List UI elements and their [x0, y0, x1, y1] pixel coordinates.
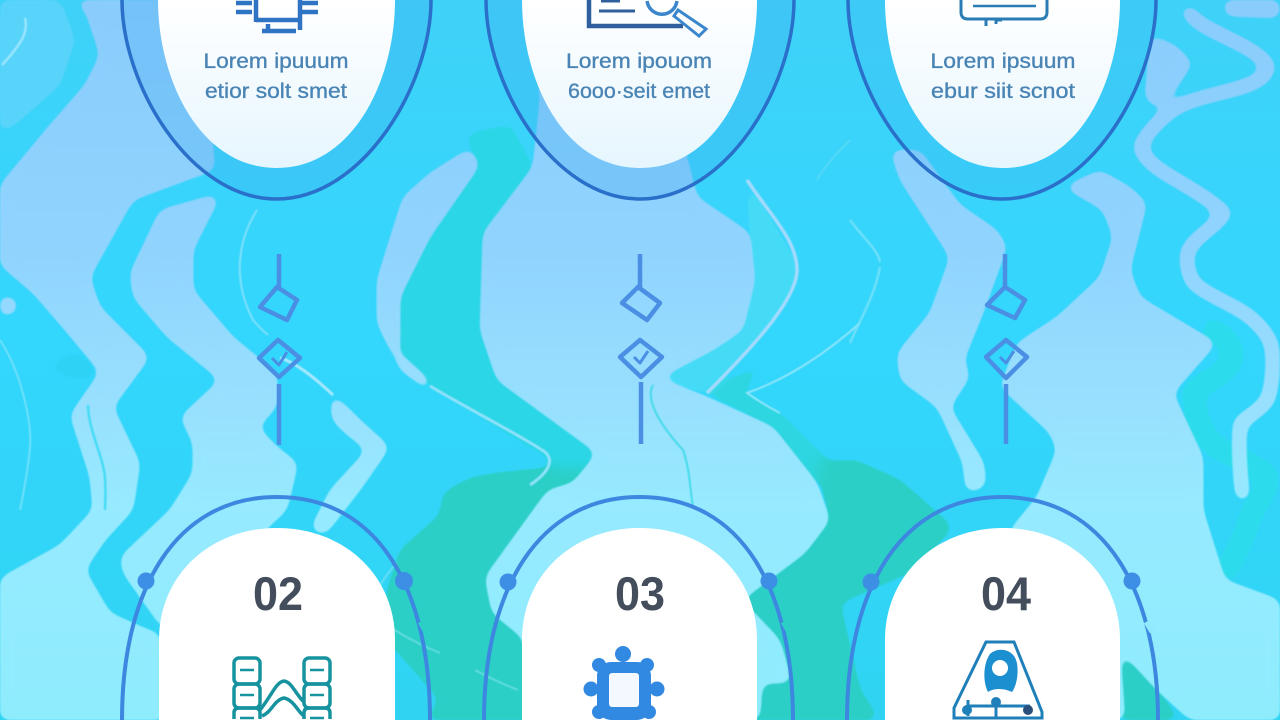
card: item 02 number (bottom left) [122, 497, 430, 720]
connector: column 1 [259, 254, 300, 445]
icon: message bubble [961, 0, 1047, 26]
label: item 01: etior solt smet [205, 80, 347, 103]
number: 02: 02 [253, 567, 303, 620]
ring: item 03 [848, 0, 1156, 199]
label: item 03: Lorem ipsuum [930, 50, 1076, 73]
oval panel: bottom left [159, 528, 395, 720]
label: item 03 [930, 50, 1076, 103]
oval panel: item 03 [885, 0, 1120, 168]
ring dots: bottom left [138, 572, 413, 590]
oval panel: item 02 [522, 0, 757, 168]
ring dots: bottom right [862, 572, 1140, 590]
label: item 01: Lorem ipuuum [204, 50, 348, 73]
label: item 02: Lorem ipouom [566, 50, 712, 73]
ring: bottom left [122, 497, 430, 720]
card: item 03 number (bottom centre) [484, 497, 793, 720]
oval panel: bottom right [885, 528, 1120, 720]
number: 03: 03 [615, 567, 665, 620]
oval panel: bottom centre [522, 528, 757, 720]
icon: network triangle [954, 642, 1042, 718]
icon: servers with wave [234, 658, 330, 719]
label: item 03: ebur siit scnot [931, 80, 1075, 103]
ring: bottom right [847, 497, 1158, 720]
icon: document with magnifier [589, 0, 706, 36]
icon: circuit chip [236, 0, 318, 31]
card: item 01 (top left) [122, 0, 431, 199]
ring: bottom centre [484, 497, 793, 720]
connector: column 3 [986, 254, 1027, 444]
card: item 03 (top right) [848, 0, 1156, 199]
ring gap [783, 622, 789, 632]
oval panel: item 01 [158, 0, 395, 168]
card: item 02 (top centre) [486, 0, 794, 199]
icon: gear chip [584, 646, 664, 720]
label: item 02 [566, 50, 712, 103]
ring: item 01 [122, 0, 431, 199]
label: item 02: 6ooo·seit emet [568, 80, 710, 103]
ring gap [1146, 622, 1152, 632]
ring gap [420, 622, 426, 632]
ring dots: bottom centre [500, 572, 778, 590]
connector: column 2 [620, 254, 662, 444]
ring: item 02 [486, 0, 794, 199]
label: item 01 [204, 50, 348, 103]
number: 04: 04 [981, 567, 1031, 620]
card: item 04 number (bottom right) [847, 497, 1158, 720]
